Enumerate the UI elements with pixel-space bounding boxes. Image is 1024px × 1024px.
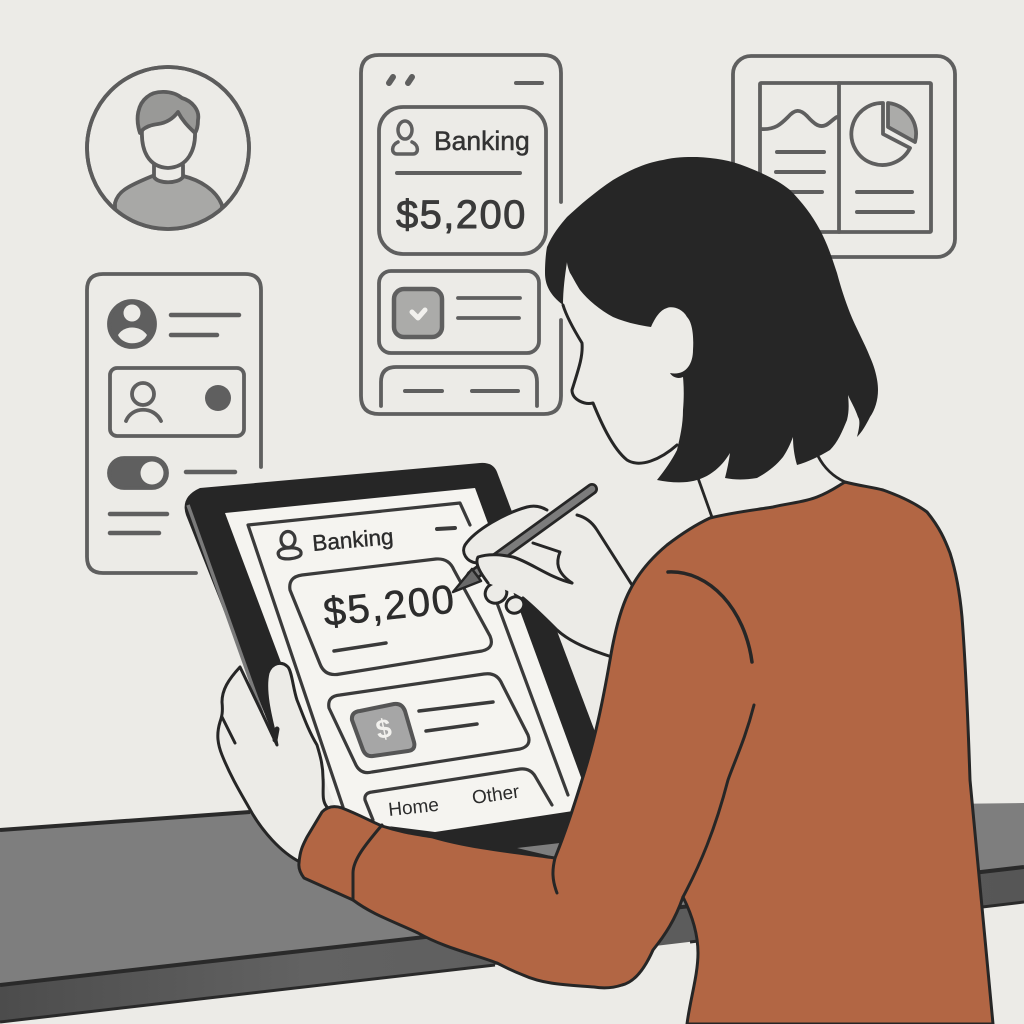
icon: profile badge [109,301,155,347]
shoulder seam [668,572,752,662]
panel: left profile card [87,274,261,573]
pen [453,489,592,592]
balance card [290,559,491,675]
transaction row [379,271,539,353]
desk [0,803,1024,1022]
panel: center banking card [361,55,561,414]
toggle switch [109,458,167,488]
tablet screen [225,488,582,832]
icon: person [278,531,301,559]
tab bar [365,769,552,820]
tablet device [185,463,600,860]
arm line [683,705,754,897]
tablet corner highlight [517,843,560,857]
user row box [110,368,244,436]
tablet screen: Banking [311,524,394,556]
face profile [563,262,700,463]
bottom navigation [381,367,537,406]
tablet screen: Other [471,781,521,809]
tablet screen: Home [387,795,440,821]
dollar icon [352,704,414,756]
tablet screen: $5,200 [321,577,458,635]
line chart [761,111,837,129]
black hair [545,157,878,482]
icon: user avatar [87,67,249,235]
tablet screen: $ [373,713,394,745]
right hand with pen [453,489,632,657]
profile text lines [171,315,239,335]
cuff seam [353,825,382,900]
window dots and dash [389,77,412,83]
settings text lines [110,472,235,533]
elbow crease [553,858,557,893]
transaction card [329,674,529,773]
balance card: Banking [434,126,530,156]
balance card [379,107,546,254]
left hand holding tablet [218,663,327,862]
neck lines [698,456,845,520]
chart text lines [776,152,913,212]
pie chart [851,103,916,165]
balance card: $5,200 [396,193,527,237]
orange sweater [299,482,993,1024]
face outline [563,305,677,463]
panel: charts card [733,56,955,257]
